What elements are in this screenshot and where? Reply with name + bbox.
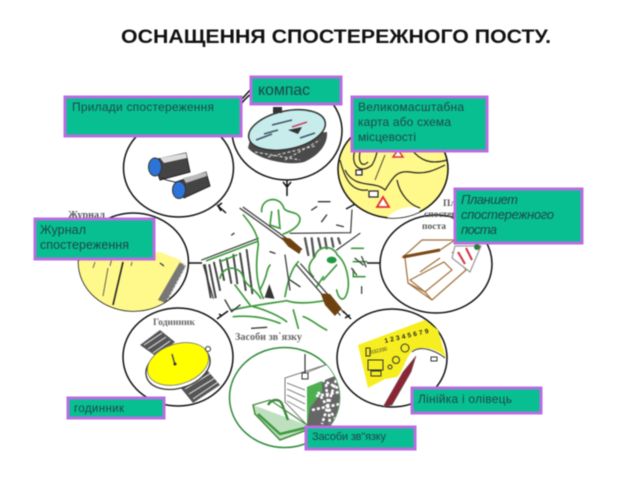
circle: observation log bbox=[70, 213, 188, 320]
callout: watch: годинник bbox=[74, 403, 125, 415]
icon: compass bbox=[245, 103, 329, 163]
label: watch caption: Годинник bbox=[153, 318, 196, 328]
icon: yellow ruler: 1 2 3 4 5 6 7 9 bbox=[384, 328, 430, 345]
circle: ruler and pencil bbox=[337, 309, 447, 407]
icon: radio and field telephone bbox=[253, 354, 345, 440]
callout: large-scale map bbox=[352, 97, 487, 151]
callout: large-scale map: Великомасштабна bbox=[358, 100, 464, 114]
callout: observation log bbox=[35, 219, 154, 259]
callout: observation instruments: Прилади спостереження bbox=[72, 100, 214, 114]
label: communications caption: Засоби зв`язку bbox=[235, 332, 302, 343]
circle: observation post tablet bbox=[380, 215, 492, 313]
callout: observation post tablet bbox=[455, 189, 582, 243]
icon: yellow ruler: 032200 bbox=[370, 346, 388, 356]
icon: pencil bbox=[383, 356, 416, 407]
label: tablet caption: поста bbox=[422, 222, 446, 232]
label: tablet caption: Пла bbox=[443, 199, 461, 209]
label: tablet caption bbox=[422, 199, 487, 232]
icon: map contours bbox=[340, 145, 447, 220]
icon: binoculars bbox=[148, 153, 210, 198]
callout: ruler and pencil bbox=[412, 388, 541, 413]
icon: tablet case bbox=[403, 240, 481, 300]
callout: watch bbox=[68, 398, 164, 418]
icon: red triangle marker bbox=[377, 197, 389, 207]
callout: large-scale map: карта або схема bbox=[358, 115, 451, 129]
callout: observation log: спостереження bbox=[40, 238, 129, 252]
callout: observation instruments bbox=[65, 97, 241, 136]
callout: observation post tablet: Планшет bbox=[461, 192, 518, 207]
circle: compass bbox=[232, 82, 342, 180]
callout: observation log: Журнал bbox=[40, 223, 86, 237]
icon: yellow ruler bbox=[358, 320, 446, 407]
circle: large-scale map bbox=[336, 136, 450, 220]
circle: communications equipment bbox=[230, 348, 345, 448]
title: ОСНАЩЕННЯ СПОСТЕРЕЖНОГО ПОСТУ. bbox=[121, 26, 551, 48]
callout: compass bbox=[251, 77, 341, 104]
icon: red triangle marker top bbox=[393, 150, 403, 157]
central scene: observers with rifles bbox=[202, 200, 367, 330]
icon: yellow log book bbox=[78, 252, 186, 312]
callout: observation post tablet: спостережного bbox=[461, 207, 554, 222]
callout: compass: компас bbox=[258, 82, 310, 99]
callout: large-scale map: місцевості bbox=[358, 130, 416, 144]
callout: observation post tablet: поста bbox=[461, 222, 497, 237]
icon: wristwatch bbox=[140, 330, 220, 403]
circle: binoculars bbox=[124, 119, 234, 217]
connector ticks between circles and scene bbox=[189, 88, 380, 319]
label: journal caption: Журнал bbox=[68, 210, 105, 221]
label: tablet caption: спостережного bbox=[424, 210, 487, 220]
callout: communications bbox=[306, 427, 415, 449]
callout: ruler and pencil: Лінійка і олівець bbox=[418, 392, 512, 406]
circle: watch bbox=[123, 308, 233, 406]
callout: communications: Засоби зв"язку bbox=[312, 431, 386, 443]
